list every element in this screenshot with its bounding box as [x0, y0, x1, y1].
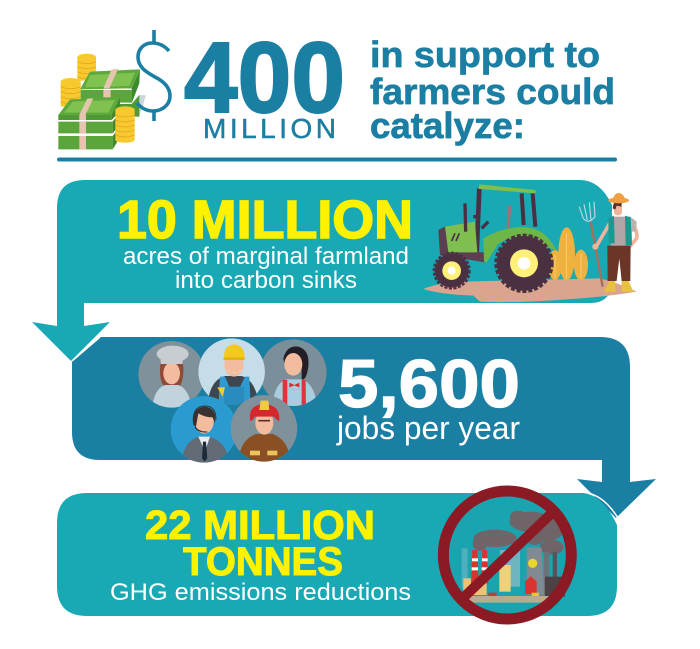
icon: woman in apron: [260, 339, 327, 408]
heading: 400 million: MILLION: [203, 113, 336, 144]
heading: in support to farmers could catalyze: farmers could: [370, 71, 615, 112]
panel: teal acres band with arrow: [32, 180, 612, 361]
panel: blue jobs band with arrow: [72, 337, 656, 518]
text: 10 million acres: into carbon sinks: [175, 267, 357, 294]
text: 22 million tonnes: [110, 502, 411, 606]
text: 22 million tonnes: GHG emissions reductions: [110, 579, 411, 606]
text: 22 million tonnes: 22 MILLION: [145, 502, 375, 548]
text: 5,600 jobs per year: jobs per year: [336, 410, 520, 446]
icon: dollar sign: [137, 30, 170, 121]
icon: chef: [138, 341, 205, 410]
icon: tractor and farmer: [423, 184, 637, 302]
icon: money stacks and coins: [58, 54, 146, 149]
text: 10 million acres: 10 MILLION: [117, 190, 413, 250]
text: 10 million acres: [117, 190, 413, 294]
heading: 400 million: 400: [184, 22, 345, 134]
text: 10 million acres: acres of marginal farmland: [123, 243, 409, 270]
heading: in support to farmers could catalyze: in support to: [370, 34, 600, 75]
heading: in support to farmers could catalyze: [370, 34, 615, 146]
icon: call centre agent: [171, 396, 237, 463]
icon: crossed out factory: [443, 491, 571, 619]
text: 22 million tonnes: TONNES: [183, 540, 343, 584]
heading: in support to farmers could catalyze: catalyze:: [370, 105, 525, 146]
panel: teal emissions band: [57, 492, 618, 616]
icon: firefighter: [231, 395, 297, 463]
text: 5,600 jobs per year: 5,600: [338, 346, 520, 422]
icon: construction worker: [198, 338, 265, 407]
icon group: workers: [138, 338, 327, 463]
